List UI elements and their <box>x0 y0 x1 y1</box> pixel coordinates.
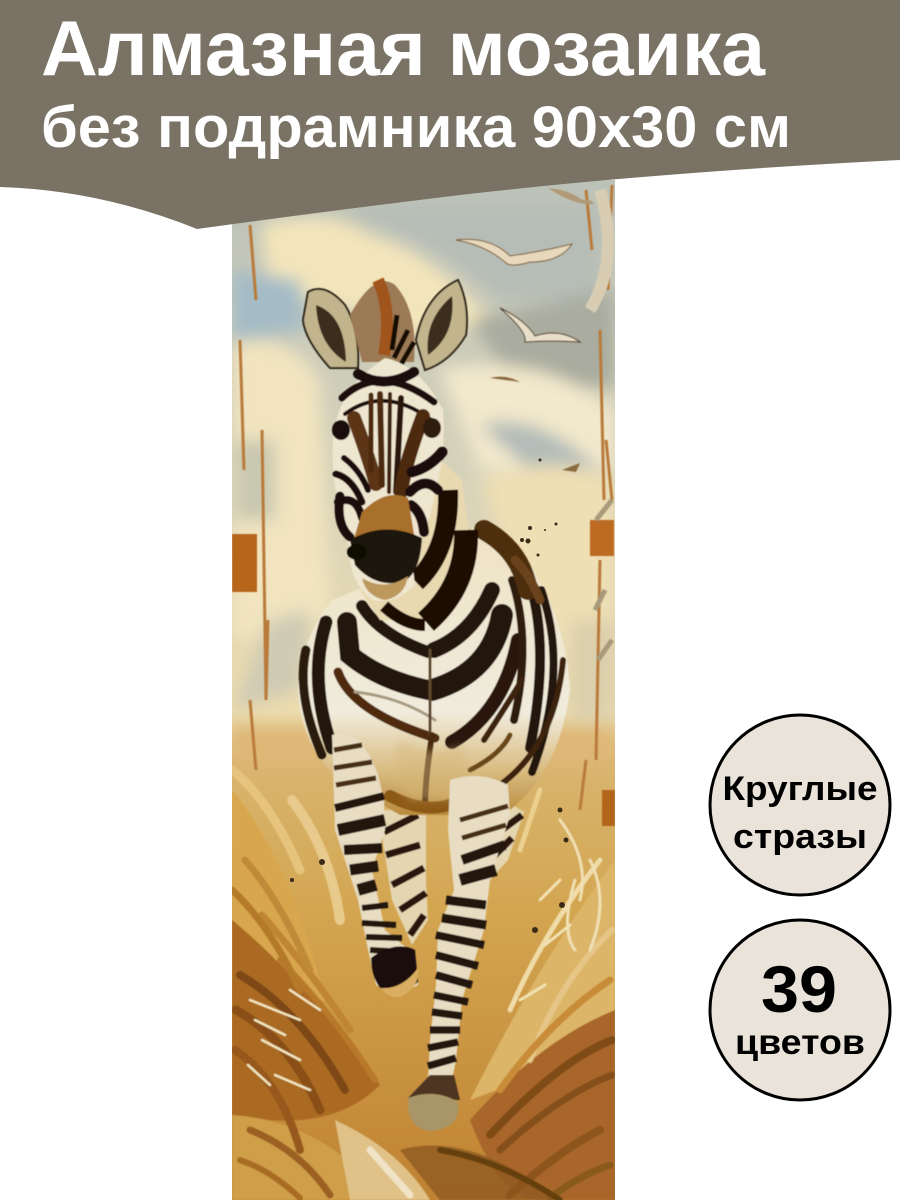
zebra body <box>298 524 570 815</box>
zebra rear legs <box>378 800 524 945</box>
zebra chest shadow <box>394 740 468 800</box>
badge text line 1: Круглые <box>722 770 878 808</box>
badge text line 2: стразы <box>733 818 867 856</box>
zebra mane <box>350 281 415 362</box>
unit label: цветов <box>735 1023 865 1062</box>
birds <box>456 188 594 472</box>
zebra neck <box>360 460 472 625</box>
badge: round rhinestones <box>708 714 892 896</box>
subtitle: без подрамника 90х30 см <box>41 95 791 160</box>
painting: running zebra <box>232 180 615 1200</box>
zebra front left leg <box>332 733 418 997</box>
number: 39 <box>761 952 837 1026</box>
zebra ears <box>303 280 467 370</box>
paint splatter <box>290 458 568 933</box>
title: Алмазная мозаика <box>41 4 766 92</box>
header banner <box>0 0 900 229</box>
sky and ground background <box>232 180 615 1200</box>
badge circle <box>710 920 890 1100</box>
banner shape <box>0 0 900 229</box>
zebra head <box>332 358 444 601</box>
rust streaks at painting edges <box>232 185 615 826</box>
zebra <box>298 280 570 1131</box>
badge circle <box>710 715 890 895</box>
badge: 39 colours <box>708 918 892 1102</box>
zebra front right leg <box>408 776 510 1131</box>
zebra body stripes <box>303 530 563 808</box>
ground brush strokes <box>232 770 615 1200</box>
